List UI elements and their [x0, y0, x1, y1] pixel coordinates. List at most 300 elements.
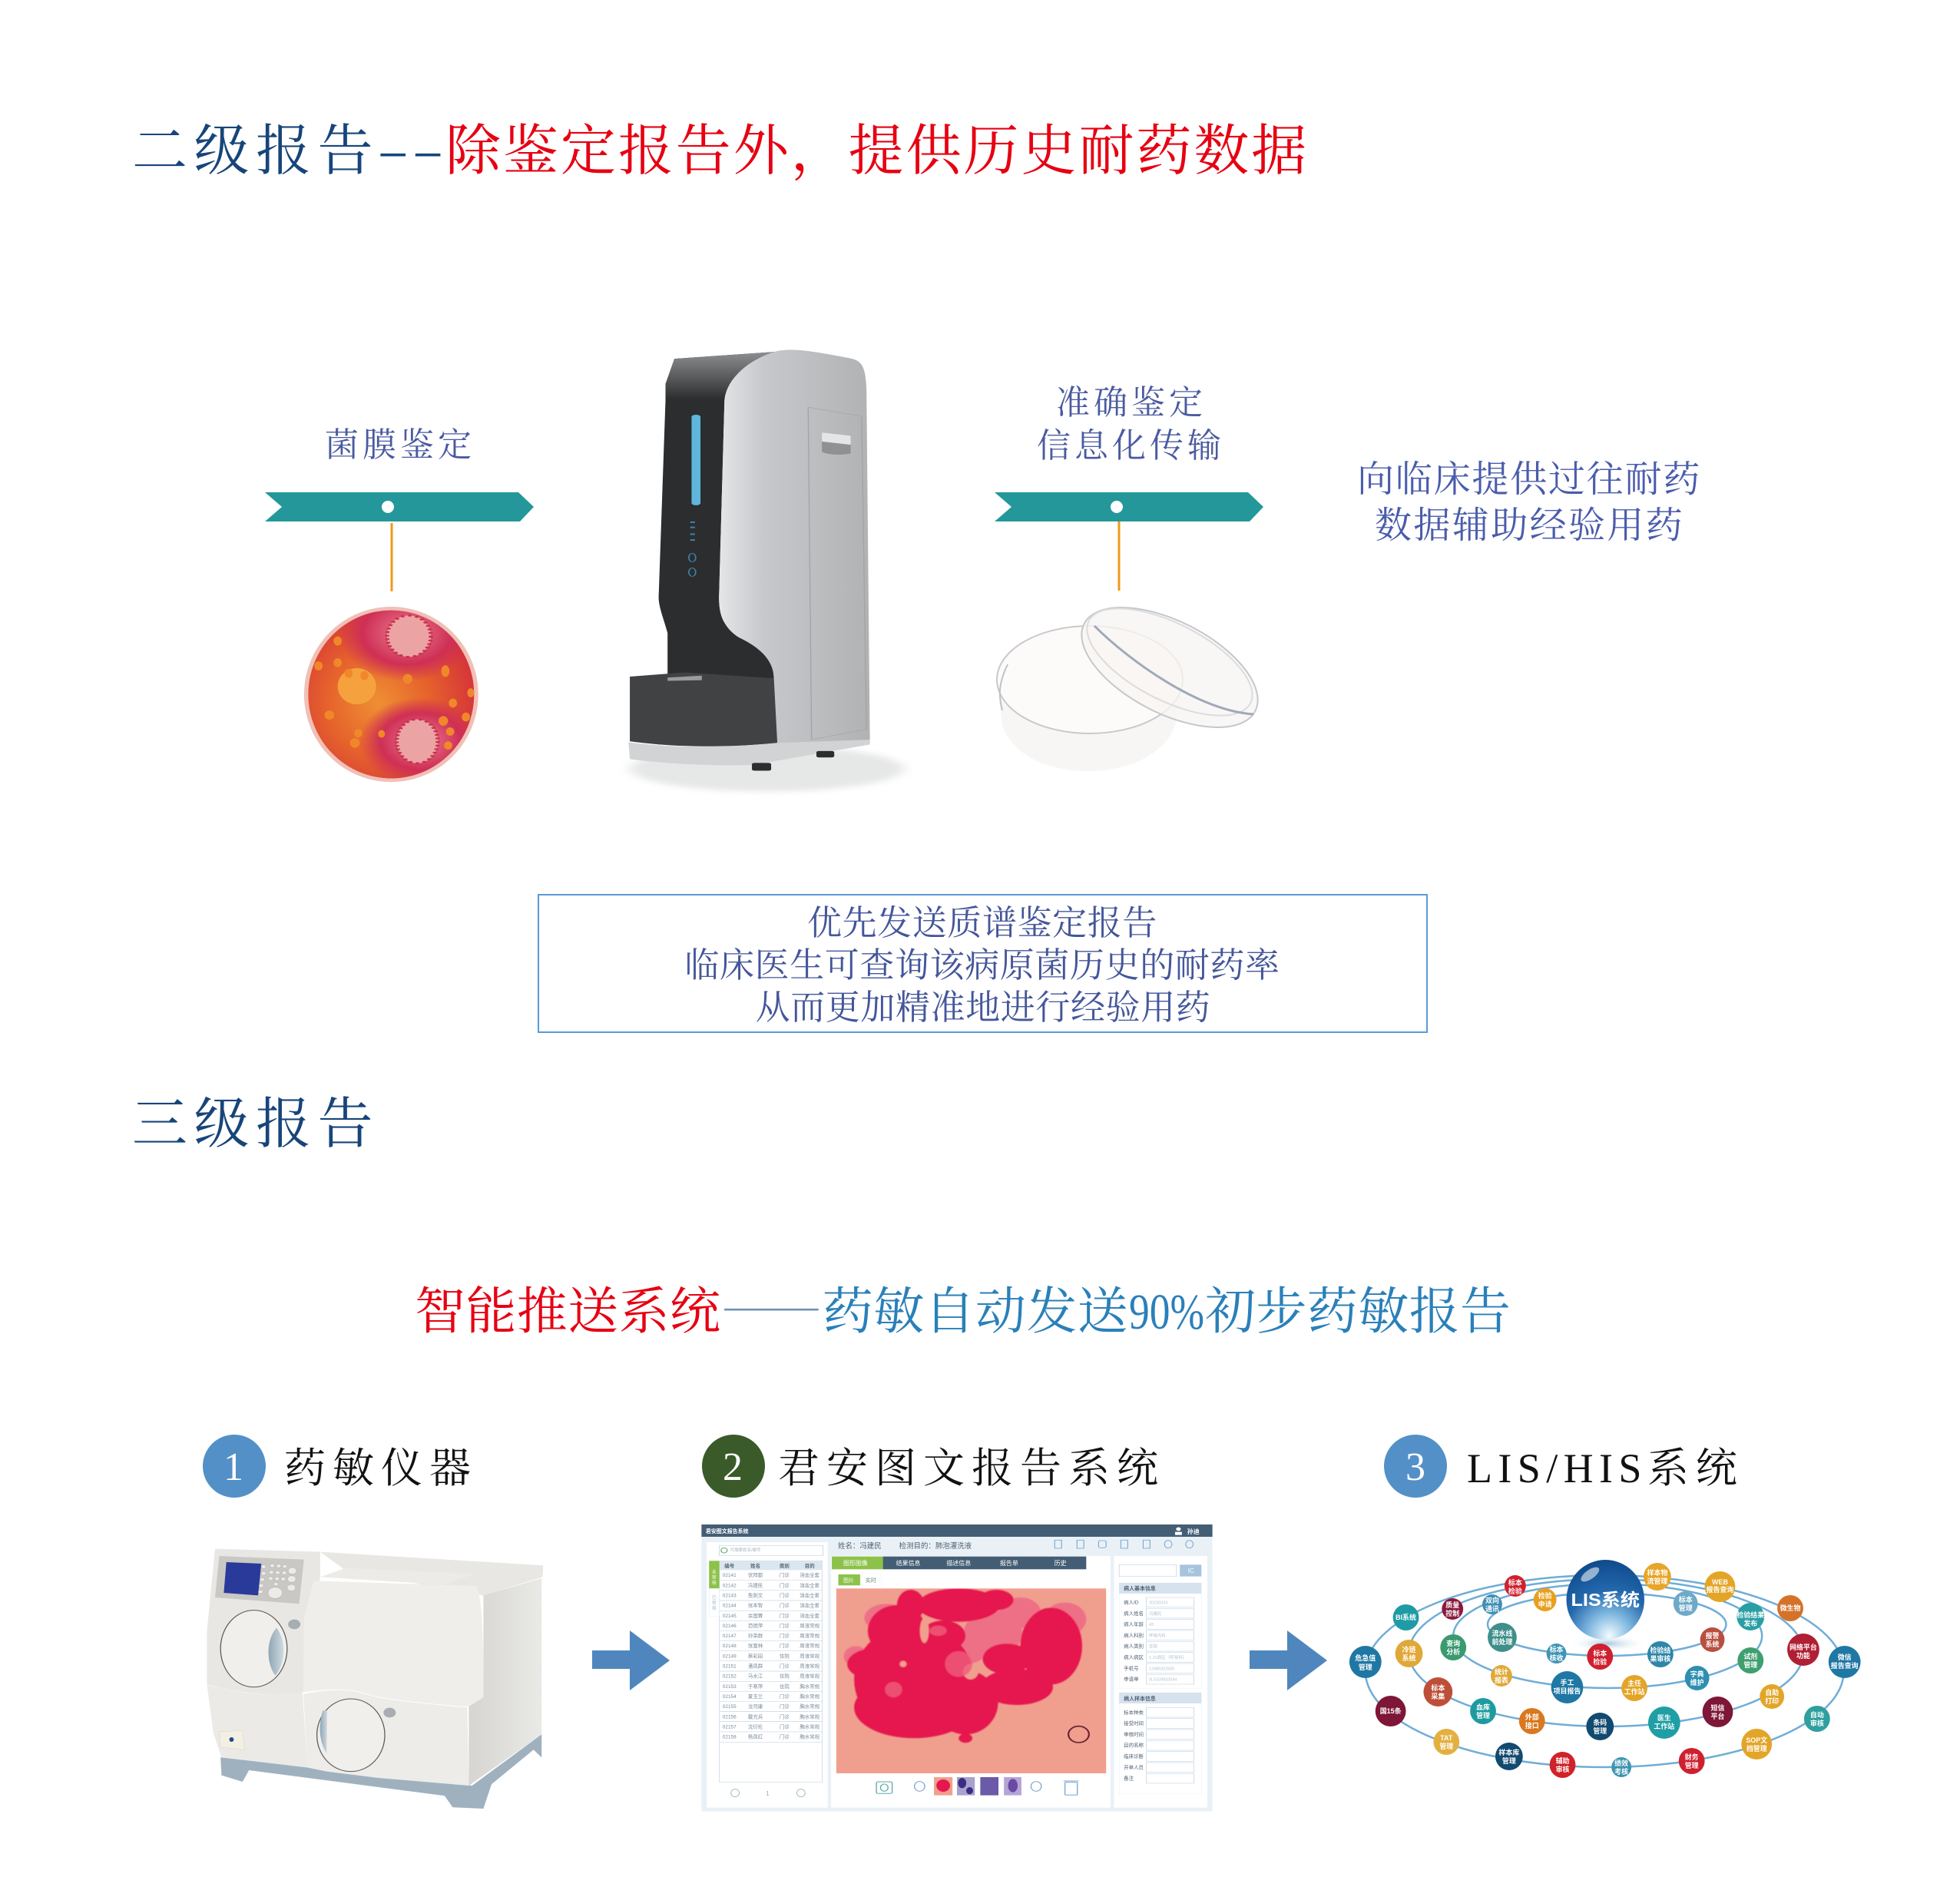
- node: 查询分析: 分析: [1446, 1647, 1460, 1656]
- UI list table: 02146: [723, 1624, 737, 1629]
- node: 主任工作站: 主任: [1627, 1679, 1641, 1687]
- node: 标本管理: 标本: [1679, 1595, 1693, 1604]
- node: 标本管理: 管理: [1679, 1604, 1693, 1612]
- dark body: [659, 352, 777, 678]
- UI list table: 溶血全套: [800, 1602, 820, 1609]
- UI list table: 已: [712, 1595, 717, 1601]
- UI header text: [706, 1528, 1200, 1535]
- UI list table: 周液常规: [800, 1652, 820, 1659]
- UI tab labels: 实时: [866, 1577, 876, 1584]
- subtitle: smart push system: 初步药敏报告: [1205, 1270, 1511, 1343]
- node: 自助打印: 自助: [1765, 1688, 1779, 1697]
- node: 血库管理: [1470, 1698, 1496, 1724]
- floor shadow: [630, 746, 904, 791]
- node: 自助打印: [1760, 1684, 1784, 1709]
- UI tab labels: 结果信息: [896, 1559, 921, 1567]
- UI form labels: 病人基本信息: [1124, 1584, 1156, 1592]
- side: [468, 1578, 541, 1786]
- lower left panel: [207, 1685, 308, 1768]
- node: 网络平台功能: 网络平台: [1789, 1643, 1817, 1651]
- UI list table: 目的: [805, 1562, 815, 1569]
- node: 标本采集: [1423, 1677, 1452, 1707]
- node: 样本库管理: [1495, 1743, 1523, 1770]
- UI list table: 门诊: [780, 1642, 790, 1649]
- UI list table: 胸水常规: [800, 1733, 820, 1740]
- node: 检验结果发布: [1737, 1603, 1764, 1630]
- label: accurate identification and information transfer: 准确鉴定: [1056, 375, 1207, 424]
- node: WEB报告查询: 报告查询: [1707, 1585, 1733, 1594]
- UI form labels: 病人病区: [1124, 1654, 1144, 1660]
- step 1 heading: 药敏仪器: [284, 1435, 478, 1495]
- node: 主任工作站: [1621, 1675, 1647, 1701]
- UI form labels: 病人样本信息: [1124, 1695, 1156, 1702]
- UI patient line: 检测目的：肺泡灌洗液: [899, 1541, 972, 1551]
- UI list table: 住院: [780, 1673, 790, 1680]
- UI list table: 审: [712, 1600, 717, 1606]
- UI tab labels: 历史: [1054, 1559, 1067, 1567]
- node: 危急值管理: [1349, 1646, 1382, 1678]
- node: 试剂管理: [1737, 1647, 1763, 1673]
- node: 质量控制: [1442, 1598, 1463, 1620]
- node: 样本物流管理: 流管理: [1647, 1577, 1667, 1585]
- node: 标本检验 outer: 检验: [1508, 1587, 1522, 1595]
- UI list table: 门诊: [780, 1703, 790, 1710]
- control panel: [215, 1556, 304, 1604]
- icon: susceptibility analyzer instrument: [207, 1549, 543, 1809]
- node: 辅助审核: 审核: [1556, 1765, 1569, 1773]
- text: provide historical resistance data to clinic: [1357, 449, 1701, 548]
- white housing: [719, 350, 870, 757]
- text: provide historical resistance data to clinic: 向临床提供过往耐药: [1357, 449, 1701, 502]
- UI form labels: 病人ID: [1124, 1598, 1139, 1606]
- UI list table: 类别: [780, 1562, 790, 1569]
- UI list table: 胸水常规: [800, 1683, 820, 1690]
- UI list table: 周液常规: [800, 1662, 820, 1670]
- node: 冷链系统: 系统: [1402, 1654, 1415, 1662]
- upper round door: [220, 1611, 287, 1687]
- node: 统计报表: [1491, 1665, 1512, 1687]
- UI list table: 溶血全套: [800, 1612, 820, 1619]
- UI list table: 02145: [723, 1614, 737, 1619]
- node: 自动审核: 审核: [1810, 1719, 1824, 1727]
- UI list table: 马水江: [748, 1673, 763, 1680]
- node: 财务管理: 管理: [1685, 1761, 1699, 1769]
- step 1 heading: [203, 1435, 478, 1498]
- screenshot: report system UI: [701, 1524, 1213, 1812]
- node: 血库管理: 管理: [1476, 1711, 1490, 1720]
- UI list table: 范德萍: [748, 1622, 763, 1629]
- UI list table: 姓名: [750, 1562, 760, 1569]
- light strip: [691, 415, 700, 505]
- arrow banner: right: [995, 492, 1263, 591]
- UI list table: 溶血全套: [800, 1581, 820, 1588]
- UI list table: 门诊: [780, 1713, 790, 1720]
- UI list table: 02151: [723, 1663, 737, 1670]
- user icon: [1176, 1528, 1181, 1531]
- node: 报警系统: 系统: [1706, 1640, 1720, 1648]
- UI list table: 02147: [723, 1634, 737, 1639]
- node: BI系统: BI系统: [1396, 1613, 1416, 1621]
- node: 字典维护: [1685, 1666, 1710, 1690]
- node: 双向通讯: 双向: [1485, 1596, 1499, 1604]
- node: 条码管理: 条码: [1593, 1718, 1607, 1726]
- title: level 2 report: 除鉴定报告外，提供历史耐药数据: [445, 106, 1309, 186]
- node: 危急值管理: 危急值: [1355, 1654, 1376, 1662]
- node: 微信报告查询: [1829, 1646, 1861, 1678]
- node: 流水线前处理: 前处理: [1492, 1637, 1512, 1646]
- UI list table: 02141: [723, 1573, 737, 1578]
- badge: [219, 1730, 244, 1750]
- UI tab labels: 图片: [843, 1577, 854, 1584]
- node: 流水线前处理: [1488, 1623, 1517, 1652]
- UI header text: 孙迪: [1187, 1528, 1200, 1535]
- UI list table: 02152: [723, 1674, 737, 1680]
- node: 样本物流管理: [1644, 1563, 1671, 1591]
- node: 标本检验 outer: [1505, 1575, 1526, 1597]
- node: 微生物: [1777, 1595, 1803, 1621]
- node: 标本核收: 核收: [1550, 1654, 1564, 1662]
- node: SOP文档管理: SOP文: [1746, 1736, 1767, 1744]
- node: 自动审核: [1804, 1706, 1830, 1732]
- node: 标本采集: 采集: [1431, 1692, 1445, 1700]
- node: 检验结果审核: 果审核: [1650, 1654, 1670, 1663]
- UI list table: 未: [712, 1569, 717, 1575]
- UI list table: [712, 1547, 820, 1797]
- step 3 heading: LIS/HIS系统: [1467, 1435, 1744, 1495]
- globe shadow: [1568, 1635, 1647, 1652]
- UI form labels: 审核时间: [1124, 1730, 1144, 1737]
- UI tab labels: [843, 1559, 1194, 1584]
- callout box: 优先发送质谱鉴定报告: [807, 895, 1157, 945]
- node: 危急值管理: 管理: [1359, 1663, 1372, 1671]
- node: 字典维护: 维护: [1690, 1678, 1704, 1687]
- node: 手工项目报告: 项目报告: [1554, 1687, 1581, 1695]
- UI list table: 02153: [723, 1684, 737, 1690]
- diagram: LIS system orbit map: [1349, 1560, 1861, 1778]
- UI list table: 周液常规: [800, 1673, 820, 1680]
- UI tab labels: 描述信息: [946, 1559, 971, 1567]
- label: accurate identification and information transfer: [1037, 375, 1225, 467]
- node: 质量控制: 控制: [1445, 1609, 1459, 1617]
- node: WEB报告查询: [1705, 1571, 1735, 1602]
- UI form labels: 病人科别: [1124, 1631, 1144, 1638]
- step 1 heading: 1: [223, 1445, 243, 1489]
- UI list table: 詹则文: [748, 1591, 763, 1599]
- main upper panel: [303, 1581, 483, 1707]
- subtitle: smart push system: [415, 1270, 1511, 1343]
- UI list table: 住院: [780, 1683, 790, 1690]
- node: 冷链系统: [1396, 1640, 1422, 1667]
- door outline: [808, 407, 866, 740]
- subtitle: smart push system: 90%: [1129, 1283, 1204, 1339]
- node: 短信平台: 短信: [1711, 1703, 1724, 1712]
- node: 检验结果发布: 检验结果: [1737, 1611, 1764, 1619]
- tabs: [883, 1557, 1086, 1569]
- UI form labels: 备注: [1124, 1775, 1134, 1782]
- node: 血库管理: 血库: [1476, 1703, 1490, 1711]
- top: [320, 1552, 543, 1595]
- UI form labels: 标本种类: [1124, 1709, 1144, 1716]
- orbit rings: [1366, 1575, 1844, 1767]
- node: 外部接口: [1519, 1708, 1545, 1734]
- UI form labels: 临床诊断: [1124, 1753, 1144, 1759]
- UI list table: 核: [712, 1605, 717, 1611]
- node: WEB报告查询: WEB: [1712, 1578, 1728, 1586]
- node: 网络平台功能: [1787, 1634, 1819, 1666]
- node: 检验结果审核: 检验结: [1650, 1646, 1670, 1654]
- UI form labels: 冯建民: [1149, 1611, 1162, 1617]
- node: 标本检验 outer: 标本: [1508, 1578, 1522, 1587]
- UI list table: 门诊: [780, 1602, 790, 1609]
- arrow: instrument to report system: [592, 1630, 670, 1690]
- label: biofilm identification: 菌膜鉴定: [325, 417, 475, 466]
- node: 流水线前处理: 流水线: [1492, 1629, 1512, 1637]
- UI list table: 02158: [723, 1735, 737, 1740]
- window frames: [701, 1524, 1213, 1812]
- UI list table: 02155: [723, 1704, 737, 1710]
- orbit nodes: [1349, 1563, 1861, 1778]
- node: 标本核收: 标本: [1550, 1645, 1564, 1654]
- node: 双向通讯: 通讯: [1485, 1604, 1499, 1613]
- node: SOP文档管理: 档管理: [1746, 1744, 1767, 1753]
- node: 双向通讯: [1482, 1594, 1502, 1614]
- text: provide historical resistance data to clinic: 数据辅助经验用药: [1375, 495, 1684, 548]
- UI list table: 审: [712, 1574, 717, 1581]
- UI form labels: 目的名称: [1124, 1742, 1144, 1749]
- icon: empty petri dish with lid: [997, 583, 1276, 771]
- UI form labels: 43: [1149, 1623, 1154, 1627]
- node: 绩效考核: [1611, 1757, 1631, 1777]
- UI list table: 胸水常规: [800, 1713, 820, 1720]
- UI list table: 02149: [723, 1654, 737, 1659]
- search and list: [720, 1545, 823, 1556]
- node: 短信平台: [1703, 1697, 1733, 1727]
- title: level 3 report: 三级报告: [132, 1079, 379, 1159]
- node: 自动审核: 自动: [1810, 1710, 1824, 1719]
- callout box: 临床医生可查询该病原菌历史的耐药率: [684, 937, 1280, 987]
- UI list table: 冯建民: [748, 1581, 763, 1588]
- node: 条码管理: [1586, 1713, 1614, 1740]
- node: 网络平台功能: 功能: [1796, 1651, 1810, 1660]
- lower right panel: [303, 1690, 468, 1786]
- UI list table: 02144: [723, 1604, 737, 1609]
- node: 自助打印: 打印: [1765, 1697, 1779, 1705]
- node: 手工项目报告: 手工: [1561, 1678, 1574, 1687]
- node: SOP文档管理: [1741, 1729, 1772, 1759]
- UI list table: 戴光兵: [748, 1713, 763, 1720]
- node: 财务管理: 财务: [1685, 1753, 1699, 1761]
- node: 短信平台: 平台: [1711, 1712, 1724, 1720]
- node: 报警系统: [1700, 1627, 1724, 1652]
- node: 绩效考核: 考核: [1614, 1767, 1628, 1776]
- UI form labels: 病人姓名: [1124, 1610, 1144, 1617]
- UI form labels: 开单人员: [1124, 1763, 1144, 1770]
- UI list table: 1: [766, 1790, 770, 1797]
- right form: [1119, 1564, 1177, 1577]
- UI list table: 住院: [780, 1652, 790, 1659]
- callout box: 从而更加精准地进行经验用药: [756, 979, 1210, 1029]
- node: TAT管理: TAT: [1440, 1734, 1453, 1742]
- node: 样本库管理: 样本库: [1498, 1748, 1519, 1756]
- UI list table: 核: [712, 1580, 717, 1586]
- UI tab labels: 报告单: [1000, 1559, 1018, 1567]
- step 3 heading: 3: [1405, 1445, 1425, 1489]
- node: 查询分析: 查询: [1446, 1639, 1460, 1647]
- UI form labels: 13485302585: [1149, 1667, 1174, 1671]
- node: 标本检验 inner: [1587, 1644, 1613, 1670]
- node: 标本检验 inner: 检验: [1593, 1657, 1607, 1666]
- UI form labels: 1-21病区（呼吸科）: [1149, 1654, 1187, 1660]
- node: 查询分析: [1440, 1634, 1466, 1660]
- UI list table: 02142: [723, 1583, 737, 1588]
- icon: culture plate with colonies: [304, 607, 478, 782]
- node: 外部接口: 接口: [1525, 1721, 1539, 1730]
- UI list table: 胸水常规: [800, 1693, 820, 1700]
- UI list table: 夏玉兰: [748, 1693, 763, 1700]
- UI list table: 02154: [723, 1694, 737, 1700]
- UI list table: 门诊: [780, 1571, 790, 1578]
- node: 检验结果审核: [1647, 1641, 1674, 1667]
- UI list table: 周液常规: [800, 1642, 820, 1649]
- node: 财务管理: [1679, 1748, 1705, 1774]
- lower round door: [317, 1699, 385, 1772]
- UI list table: 门诊: [780, 1723, 790, 1730]
- globe label: LIS系统: [1571, 1590, 1640, 1610]
- UI form labels: 接受时间: [1124, 1720, 1144, 1726]
- node: 国15条: [1376, 1696, 1406, 1726]
- node: BI系统: [1393, 1604, 1419, 1630]
- UI form labels: 0L5329833044: [1149, 1678, 1177, 1683]
- node: 医生工作站: 工作站: [1654, 1722, 1674, 1730]
- label: accurate identification and information transfer: 信息化传输: [1037, 418, 1225, 467]
- UI form labels: 手机号: [1124, 1664, 1139, 1671]
- node: 手工项目报告: [1551, 1671, 1583, 1703]
- UI list table: 孙荣群: [748, 1632, 763, 1639]
- UI list table: 可搜索姓名/编号: [730, 1547, 761, 1553]
- node: 统计报表: 报表: [1495, 1676, 1508, 1684]
- node: 冷链系统: 冷链: [1402, 1645, 1415, 1654]
- node: TAT管理: [1433, 1729, 1459, 1755]
- node: 试剂管理: 试剂: [1743, 1652, 1757, 1660]
- UI form labels: 申请单: [1124, 1676, 1139, 1683]
- UI form labels: 住院: [1149, 1644, 1157, 1650]
- UI list table: 杨凤红: [748, 1733, 763, 1740]
- UI list table: 沈司康: [748, 1703, 763, 1710]
- icon: mass spectrometer tower: [628, 350, 904, 791]
- UI tab labels: IC: [1188, 1567, 1194, 1574]
- UI list table: 门诊: [780, 1612, 790, 1619]
- UI tab labels: 图形图像: [843, 1559, 868, 1567]
- UI list table: 门诊: [780, 1693, 790, 1700]
- node: 样本库管理: 管理: [1502, 1756, 1516, 1765]
- UI list table: 张本智: [748, 1602, 763, 1609]
- UI list table: 门诊: [780, 1662, 790, 1670]
- node: TAT管理: 管理: [1439, 1742, 1453, 1750]
- left column: [207, 1549, 320, 1695]
- UI list table: 门诊: [780, 1622, 790, 1629]
- node: 国15条: 国15条: [1380, 1707, 1402, 1715]
- UI list table: 张富林: [748, 1642, 763, 1649]
- UI list table: 伏拜都: [748, 1571, 763, 1578]
- node: 统计报表: 统计: [1495, 1667, 1508, 1676]
- node: 外部接口: 外部: [1525, 1713, 1539, 1721]
- UI list table: 02157: [723, 1724, 737, 1730]
- node: 字典维护: 字典: [1690, 1670, 1704, 1678]
- UI list table: 蔡彩田: [748, 1652, 763, 1659]
- UI list table: 02156: [723, 1714, 737, 1720]
- UI list table: 门诊: [780, 1733, 790, 1740]
- node: 质量控制: 质量: [1445, 1601, 1459, 1609]
- node: 样本物流管理: 样本物: [1647, 1568, 1667, 1577]
- UI form labels: 病人类别: [1124, 1643, 1144, 1650]
- UI patient line: [838, 1541, 972, 1551]
- callout box: [538, 895, 1427, 1032]
- stand: [220, 1734, 541, 1809]
- UI list table: 溶血全套: [800, 1591, 820, 1599]
- node: 辅助审核: [1550, 1752, 1575, 1778]
- UI list table: 胸水常规: [800, 1723, 820, 1730]
- UI list table: 周液常规: [800, 1622, 820, 1629]
- UI list table: 门诊: [780, 1581, 790, 1588]
- UI header text: 君安图文报告系统: [706, 1528, 749, 1534]
- UI list table: 于寒萍: [748, 1683, 763, 1690]
- title: level 2 report: 二级报告: [132, 106, 379, 186]
- node: 条码管理: 管理: [1593, 1726, 1607, 1735]
- node: 标本检验 inner: 标本: [1593, 1649, 1607, 1657]
- UI list table: 02143: [723, 1593, 737, 1599]
- node: 标本核收: [1547, 1644, 1566, 1663]
- arrow: report system to LIS/HIS: [1250, 1630, 1327, 1690]
- arrow banner: left: [265, 492, 534, 591]
- node: 报警系统: 报警: [1706, 1631, 1720, 1640]
- image toolbar: [876, 1782, 892, 1793]
- UI form labels: 20230324: [1149, 1601, 1167, 1606]
- node: 微信报告查询: 报告查询: [1831, 1661, 1859, 1670]
- node: 检验申请: [1534, 1588, 1557, 1611]
- subtitle: smart push system: 智能推送系统——药敏自动发送: [415, 1270, 1128, 1343]
- node: 试剂管理: 管理: [1743, 1660, 1757, 1669]
- node: 标本采集: 标本: [1431, 1683, 1445, 1692]
- node: 检验申请: 检验: [1538, 1591, 1552, 1600]
- node: 微信报告查询: 微信: [1838, 1653, 1852, 1661]
- UI patient line: 姓名：冯建民: [838, 1541, 882, 1551]
- UI list table: 余国菁: [748, 1612, 763, 1619]
- UI list table: 周液常规: [800, 1632, 820, 1639]
- UI form labels: 呼吸内科: [1149, 1632, 1166, 1638]
- node: 检验结果发布: 发布: [1743, 1619, 1757, 1627]
- node: 辅助审核: 辅助: [1556, 1756, 1569, 1765]
- UI list table: 02148: [723, 1644, 737, 1649]
- UI form labels: [1124, 1584, 1187, 1782]
- node: 微生物: 微生物: [1780, 1604, 1800, 1612]
- node: 标本管理: [1674, 1591, 1698, 1616]
- node: 医生工作站: [1648, 1707, 1680, 1739]
- base block: [630, 673, 777, 746]
- node: 检验申请: 申请: [1538, 1600, 1552, 1608]
- UI list table: 编号: [724, 1562, 735, 1569]
- globe: [1566, 1560, 1644, 1640]
- UI list table: 潘凤群: [748, 1662, 763, 1670]
- UI list table: 胸水常规: [800, 1703, 820, 1710]
- title: level 2 report: --: [376, 107, 446, 186]
- toolbar icons: [1054, 1540, 1194, 1548]
- node: 医生工作站: 医生: [1657, 1713, 1671, 1722]
- node: 主任工作站: 工作站: [1624, 1687, 1644, 1696]
- UI list table: 门诊: [780, 1632, 790, 1639]
- step 2 heading: 2: [723, 1445, 743, 1489]
- UI list table: 溶血全套: [800, 1571, 820, 1578]
- step 2 heading: 君安图文报告系统: [778, 1435, 1165, 1495]
